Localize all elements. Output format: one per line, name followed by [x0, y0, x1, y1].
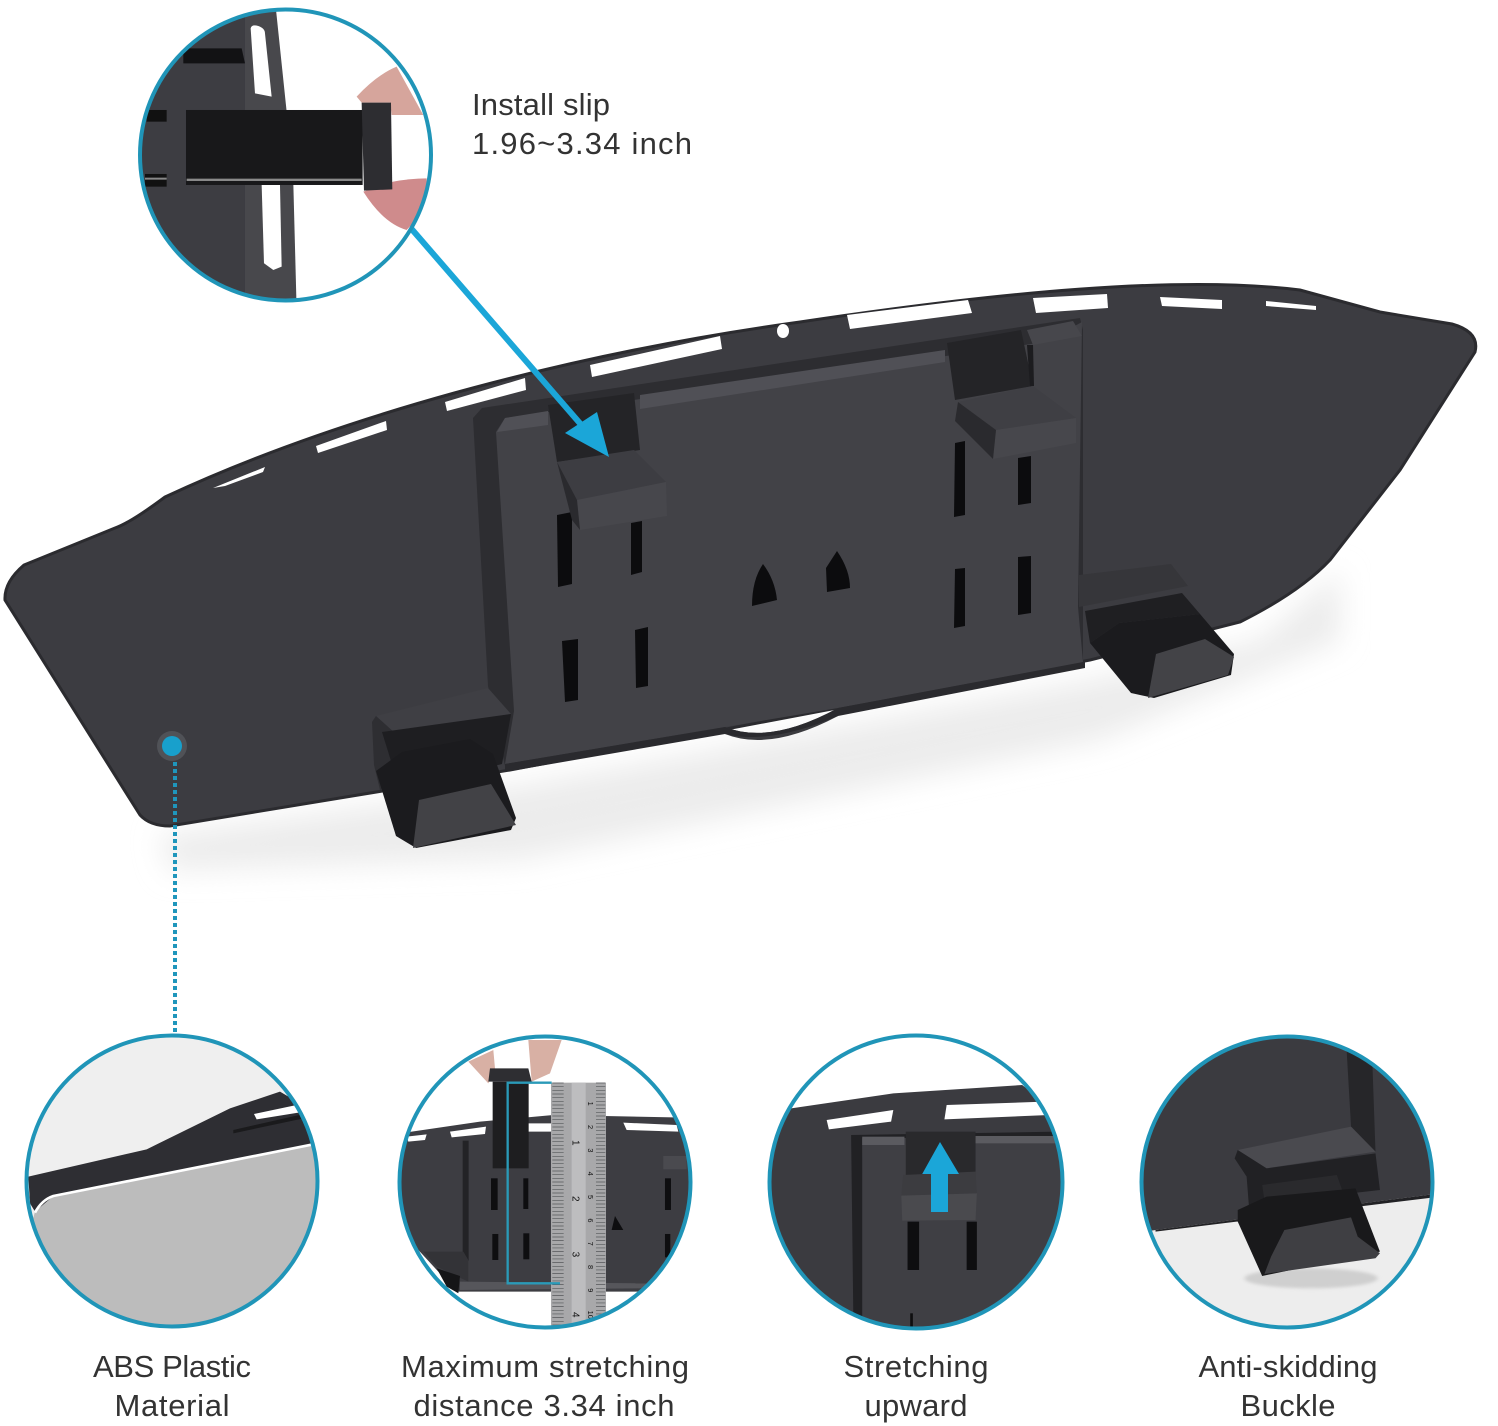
zoom circle: ABS plastic — [24, 1034, 320, 1328]
label: anti-skidding buckle: Buckle — [1240, 1388, 1336, 1423]
left clip — [548, 393, 667, 530]
label: anti-skidding buckle — [1198, 1349, 1378, 1423]
zoom circle: stretching distance with ruler: 4 — [570, 1312, 581, 1318]
zoom circle: stretching distance with ruler: 2 — [570, 1196, 581, 1202]
product: sun visor mirror — [5, 284, 1476, 848]
center plate — [473, 318, 1085, 772]
zoom circle: stretching distance with ruler: 10 — [586, 1311, 595, 1319]
label: maximum stretching distance: distance 3.34 inch — [414, 1388, 674, 1423]
plate slots — [557, 441, 1031, 702]
zoom circle: stretching distance with ruler: 2 — [586, 1125, 595, 1129]
zoom circle: stretching distance with ruler: 7 — [586, 1242, 595, 1246]
zoom circle: stretching distance with ruler: 4 — [586, 1172, 595, 1176]
zoom circle: stretching distance with ruler: 5 — [586, 1195, 595, 1199]
label: maximum stretching distance: Maximum stretching — [401, 1349, 689, 1384]
label: ABS plastic material: Material — [114, 1388, 230, 1423]
label: maximum stretching distance — [401, 1349, 689, 1423]
arrow: upward — [922, 1142, 959, 1212]
arrow: clip callout — [409, 226, 609, 457]
label: ABS plastic material: ABS Plastic — [93, 1349, 251, 1384]
zoom circle: stretching distance with ruler: 8 — [586, 1265, 595, 1269]
label: stretching upward: Stretching — [844, 1349, 988, 1384]
zoom circle: stretching distance with ruler: 1 — [586, 1102, 595, 1106]
floor shadow — [160, 570, 1340, 870]
zoom circle: anti-skidding buckle — [1140, 1034, 1434, 1330]
left foot — [372, 688, 516, 848]
mirror body — [5, 284, 1476, 826]
zoom circle: install slip — [138, 8, 433, 302]
install slip label: 1.96~3.34 inch — [472, 126, 692, 161]
label: stretching upward: upward — [864, 1388, 968, 1423]
zoom circle: stretching distance with ruler — [398, 1034, 692, 1330]
install slip label: Install slip — [472, 87, 610, 122]
label: stretching upward — [844, 1349, 988, 1423]
install slip label — [472, 87, 692, 161]
label: anti-skidding buckle: Anti-skidding — [1198, 1349, 1378, 1384]
zoom circle: stretching distance with ruler: 9 — [586, 1288, 595, 1292]
zoom circle: stretching distance with ruler: 1 — [570, 1140, 581, 1146]
zoom circle: stretching distance with ruler: 6 — [586, 1218, 595, 1222]
label: ABS plastic material — [93, 1349, 251, 1423]
top slots — [213, 294, 1316, 488]
zoom circle: stretching distance with ruler: 3 — [570, 1252, 581, 1258]
zoom circle: stretching distance with ruler: 3 — [586, 1148, 595, 1152]
right foot — [1079, 564, 1234, 698]
zoom circle: stretching upward — [768, 1034, 1064, 1330]
right clip — [947, 321, 1082, 459]
callout marker: material — [157, 731, 187, 1036]
